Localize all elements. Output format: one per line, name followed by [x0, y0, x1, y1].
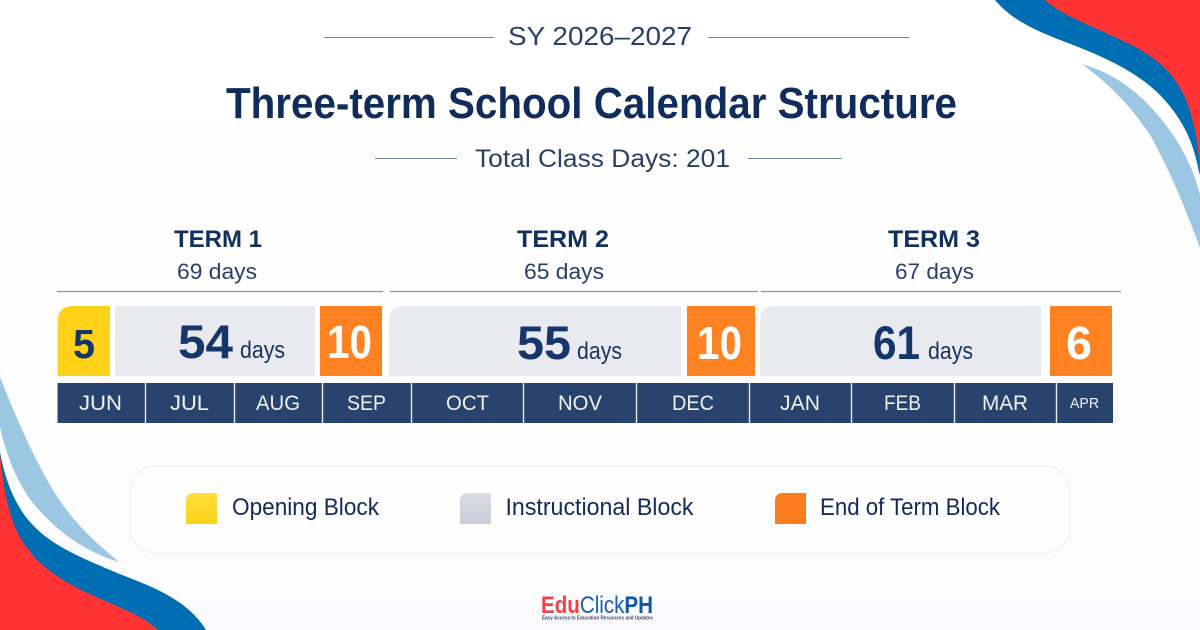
- term 1 heading: [57, 226, 383, 292]
- term 3 heading: [761, 226, 1121, 292]
- month bar: NOV: [558, 392, 602, 415]
- legend item: instructional block: [460, 493, 694, 524]
- legend item: end of term block: End of Term Block: [820, 494, 1001, 521]
- end of term block: 10 days: [320, 306, 382, 376]
- month bar: AUG: [256, 392, 300, 415]
- legend item: instructional block: Instructional Block: [506, 494, 694, 521]
- school year heading: SY 2026–2027: [508, 21, 692, 51]
- legend item: opening block: Opening Block: [232, 494, 380, 521]
- end of term block: 10 days: [687, 306, 755, 376]
- term 1 heading: TERM 1: [174, 226, 262, 253]
- logo: EduClickPH: Easy Access to Education Resources and Updates: [542, 616, 653, 622]
- ribbon: bottom left corner: [0, 377, 206, 630]
- title: Three-term School Calendar Structure: [226, 79, 957, 128]
- term 2 heading: [390, 226, 758, 292]
- instructional block: 54 days: 54: [178, 315, 233, 368]
- opening block: 5 days: [58, 306, 110, 376]
- legend panel: [130, 466, 1070, 553]
- month bar: DEC: [672, 392, 714, 415]
- month bar: [58, 383, 1113, 423]
- end of term block: 10 days: 10: [327, 316, 372, 368]
- legend item: end of term block: [775, 493, 1001, 524]
- instructional block: 55 days: days: [577, 338, 622, 365]
- instructional block: 54 days: days: [240, 337, 285, 364]
- term 1 heading: 69 days: [177, 259, 257, 284]
- instructional block: 54 days: [115, 306, 315, 376]
- opening block: 5 days: 5: [73, 321, 95, 367]
- subtitle: total class days: Total Class Days: 201: [475, 145, 730, 173]
- term 2 heading: TERM 2: [517, 226, 609, 253]
- month bar: JUN: [79, 392, 122, 415]
- term 2 heading: 65 days: [524, 259, 604, 284]
- end of term block: 6 days: [1050, 306, 1112, 376]
- term 1 blocks: [58, 306, 382, 376]
- month bar: SEP: [347, 392, 386, 415]
- logo: EduClickPH: EduClickPH: [541, 592, 653, 619]
- ribbon: top right corner: [995, 0, 1200, 248]
- legend item: opening block: [186, 493, 380, 524]
- term 2 blocks: [389, 306, 755, 376]
- month bar: JUL: [170, 392, 209, 415]
- term 3 blocks: [760, 306, 1112, 376]
- instructional block: 61 days: days: [928, 338, 973, 365]
- instructional block: 55 days: [389, 306, 681, 376]
- instructional block: 61 days: 61: [873, 316, 920, 369]
- month bar: MAR: [982, 392, 1028, 415]
- month bar: FEB: [884, 392, 921, 415]
- term 3 heading: 67 days: [895, 259, 974, 284]
- month bar: OCT: [446, 392, 489, 415]
- instructional block: 55 days: 55: [517, 316, 571, 369]
- month bar: JAN: [780, 392, 820, 415]
- instructional block: 61 days: [760, 306, 1041, 376]
- end of term block: 6 days: 6: [1066, 317, 1092, 369]
- end of term block: 10 days: 10: [697, 317, 742, 369]
- month bar: APR: [1070, 395, 1099, 412]
- term 3 heading: TERM 3: [888, 226, 980, 253]
